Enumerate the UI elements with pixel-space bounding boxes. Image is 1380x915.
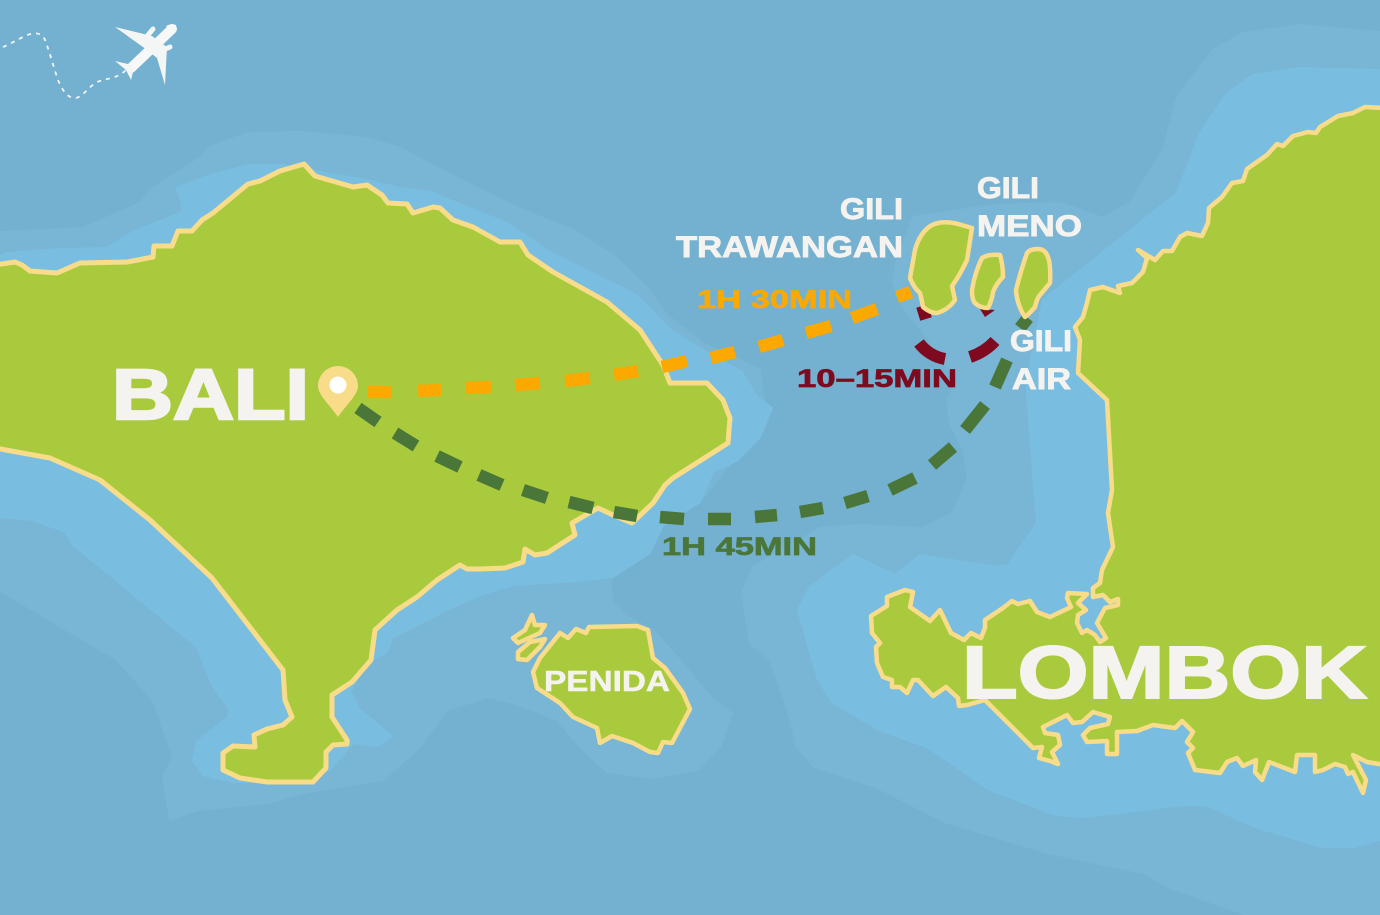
- label: Gili Air: AIR: [1012, 363, 1071, 396]
- label: Gili Air: [1010, 325, 1072, 396]
- island: Gili Trawangan: [910, 222, 972, 313]
- label: Penida: PENIDA: [544, 666, 670, 698]
- label: Gili Trawangan: GILI: [840, 193, 903, 226]
- duration label: 1h 30min: 1H 30MIN: [697, 286, 852, 314]
- island: Gili Meno: [972, 255, 1003, 308]
- route: Bali to Gili Trawangan, 1h 30min: [368, 292, 911, 392]
- icon: location pin on Bali: [318, 366, 358, 417]
- route: Bali to Gili Air, 1h 45min: [358, 318, 1028, 519]
- label: Gili Trawangan: [676, 193, 903, 264]
- label: Bali: BALI: [112, 356, 309, 435]
- label: Gili Meno: GILI: [977, 172, 1039, 205]
- route: between the Gili islands, 10-15min: [919, 306, 995, 359]
- island: Lombok: [871, 107, 1380, 793]
- duration label: 1h 45min: 1H 45MIN: [662, 533, 817, 561]
- label: Gili Trawangan: TRAWANGAN: [676, 231, 903, 264]
- label: Gili Air: GILI: [1010, 325, 1072, 358]
- label: Gili Meno: [977, 172, 1082, 243]
- duration label: 10-15min: 10–15MIN: [797, 365, 957, 393]
- island: Nusa Penida: [513, 615, 690, 753]
- island: Bali: [0, 164, 730, 782]
- icon: airplane with dotted flight path: [3, 24, 176, 98]
- label: Lombok: LOMBOK: [962, 631, 1367, 714]
- island: Gili Air: [1016, 249, 1050, 317]
- label: Gili Meno: MENO: [977, 210, 1082, 243]
